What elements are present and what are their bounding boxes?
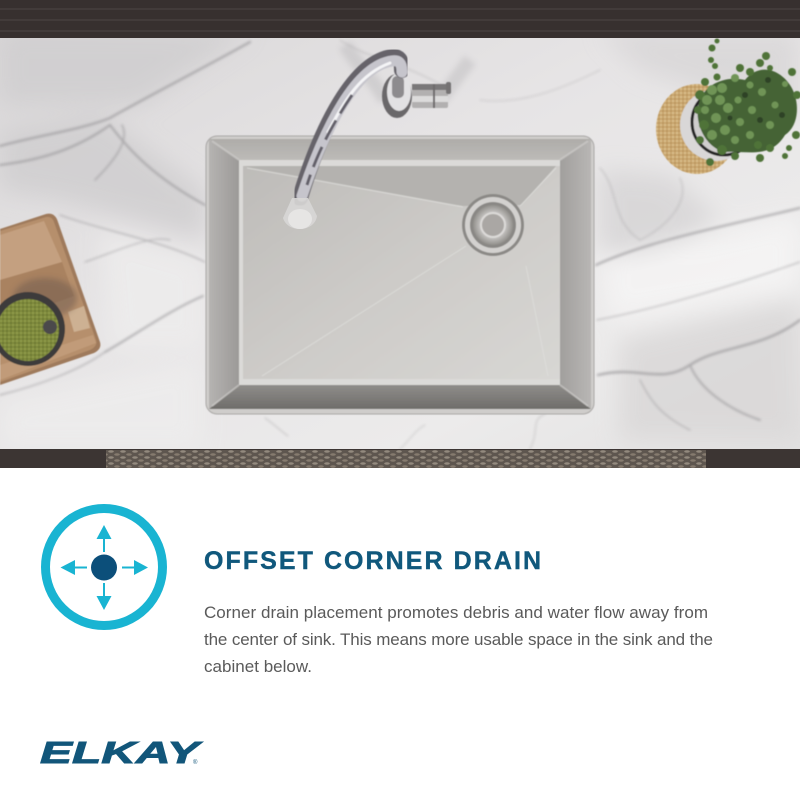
drain <box>462 194 524 256</box>
bowl shadow <box>13 278 77 318</box>
icon center dot <box>91 554 117 580</box>
sink basin <box>206 136 594 414</box>
body text <box>204 603 713 676</box>
body text: Corner drain placement promotes debris and water flow away from <box>204 603 708 622</box>
sink creases <box>247 168 556 376</box>
straw ring <box>656 84 752 174</box>
faucet handle <box>412 82 451 108</box>
arrow right <box>122 560 148 575</box>
body text: the center of sink. This means more usable space in the sink and the <box>204 630 713 649</box>
pot <box>692 89 756 155</box>
marble veins <box>0 40 800 449</box>
top dark wood band <box>0 0 800 38</box>
arrow down <box>96 583 112 610</box>
sink walls <box>209 139 591 160</box>
body text: cabinet below. <box>204 657 312 676</box>
logo: Elkay: ® <box>193 759 198 766</box>
faucet nozzle <box>283 198 317 229</box>
arrow left <box>60 560 87 575</box>
foliage <box>694 38 800 166</box>
floor strip and rug <box>0 449 800 468</box>
heading: OFFSET CORNER DRAIN <box>204 547 541 575</box>
arrow up <box>96 525 112 552</box>
bowl of herbs <box>0 292 65 366</box>
cutting board <box>0 214 100 385</box>
sink corner highlights <box>212 141 588 406</box>
faucet spout <box>300 57 402 198</box>
marble shading <box>0 30 800 449</box>
faucet shadow <box>345 45 470 100</box>
sink floor <box>239 160 560 385</box>
potted plant <box>656 38 800 174</box>
logo: Elkay: ELKAY <box>40 735 204 770</box>
icon ring <box>46 508 162 626</box>
faucet <box>283 45 470 229</box>
faucet base <box>382 73 412 118</box>
logo: Elkay <box>40 735 204 770</box>
marble countertop <box>0 30 800 449</box>
sink rim <box>206 136 594 414</box>
icon: drain flow arrows <box>46 508 162 626</box>
